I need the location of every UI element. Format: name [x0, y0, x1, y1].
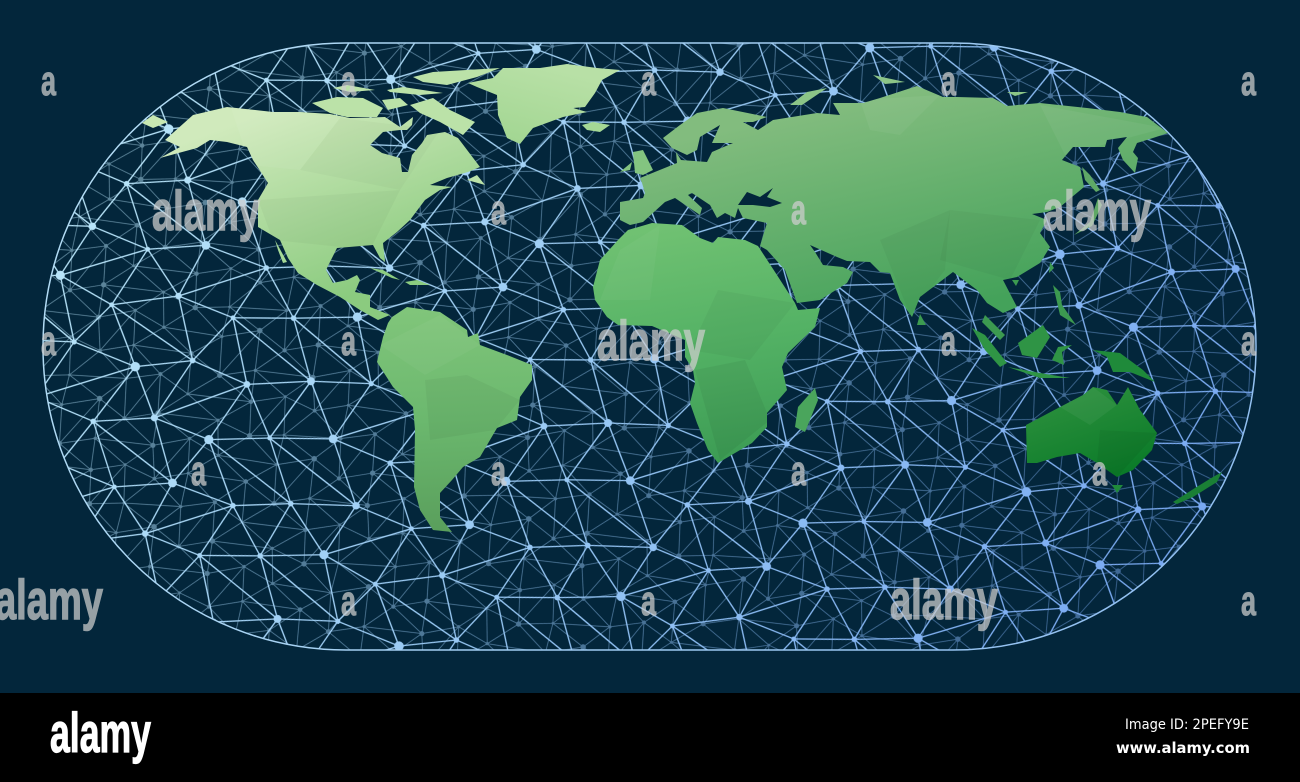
watermarks: small: a: [1241, 57, 1256, 104]
Tasmania: [1112, 485, 1123, 493]
Africa: [593, 223, 820, 463]
Philippines: [1053, 285, 1076, 325]
Taiwan and Hainan: [1012, 262, 1054, 286]
watermarks: small: a: [791, 447, 806, 494]
watermarks: large: [0, 179, 1151, 631]
Baja California: [275, 240, 287, 263]
watermarks: small: a: [491, 186, 506, 233]
watermarks: small: a: [41, 57, 56, 104]
New Guinea: [1093, 350, 1155, 382]
Eurasia: [620, 86, 1168, 317]
Borneo: [1018, 325, 1050, 358]
Arctic Russian islands: [790, 75, 1028, 105]
website: www.alamy.com: [1116, 739, 1250, 757]
Greenland: [468, 64, 620, 144]
watermark North America: alamy: [152, 179, 260, 242]
Iceland: [582, 122, 610, 132]
South America: [377, 307, 532, 532]
continents: [142, 64, 1222, 532]
New Zealand: [1173, 472, 1222, 504]
Sumatra: [972, 328, 1007, 367]
watermarks: small: a: [341, 577, 356, 624]
watermarks: small: a: [641, 57, 656, 104]
Java: [1008, 367, 1070, 378]
Sakhalin and Japan: [1074, 167, 1102, 235]
map outline: [43, 43, 1256, 650]
watermarks: small: [41, 57, 1256, 624]
watermarks: small: a: [1092, 447, 1107, 494]
Sri Lanka and Malay peninsula: [917, 314, 1005, 340]
Arctic islands: [312, 68, 500, 185]
watermarks: small: a: [941, 317, 956, 364]
footer bar: [0, 693, 1300, 782]
footer logo: alamy: [50, 701, 151, 764]
watermarks: small: a: [941, 57, 956, 104]
watermark bottom centre: alamy: [890, 568, 998, 631]
Black Sea: [738, 188, 782, 207]
low-poly facets: [696, 212, 1116, 456]
image id: Image ID: 2PEFY9E: [1125, 717, 1249, 733]
inland seas: [738, 188, 782, 207]
watermarks: small: a: [791, 186, 806, 233]
North America: [160, 107, 480, 320]
Madagascar: [795, 388, 818, 432]
watermarks: small: a: [341, 57, 356, 104]
watermark Asia: alamy: [1043, 179, 1151, 242]
Aleutian island: [142, 115, 168, 128]
watermarks: small: a: [1241, 317, 1256, 364]
British Isles: [620, 150, 653, 175]
watermarks: small: a: [491, 447, 506, 494]
Sulawesi: [1052, 345, 1072, 365]
watermarks: small: a: [41, 317, 56, 364]
Australia: [1026, 387, 1157, 477]
Caribbean islands: [370, 268, 430, 285]
watermarks: small: a: [1241, 577, 1256, 624]
watermarks: small: a: [341, 317, 356, 364]
network mesh globe: [43, 43, 1256, 650]
watermarks: small: a: [641, 577, 656, 624]
watermark Africa: alamy: [597, 309, 705, 372]
watermarks: small: a: [191, 447, 206, 494]
